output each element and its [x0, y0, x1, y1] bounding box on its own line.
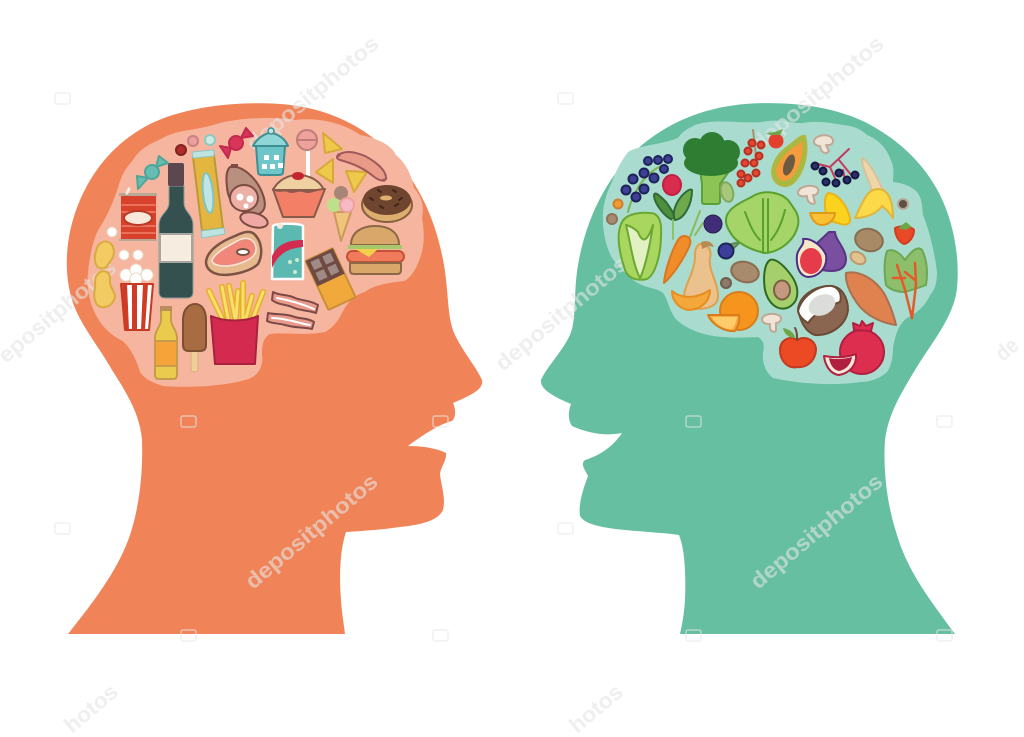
watermarks: hotos: [564, 679, 628, 737]
watermarks: depositphotos: [240, 469, 383, 594]
icon: elderberries: [812, 149, 858, 186]
icon: nacho chips: [316, 133, 367, 192]
icon: sweet potato: [846, 272, 896, 325]
icon: strawberry: [895, 222, 914, 244]
icon: avocado: [764, 260, 797, 309]
icon: teal candy: [137, 156, 168, 189]
icon: pink candy: [220, 128, 253, 158]
icon: apple: [780, 328, 816, 367]
icon: beer bottle: [155, 306, 177, 379]
icon: burger: [347, 226, 404, 274]
icon: papaya: [772, 136, 806, 186]
icon: napa cabbage: [619, 213, 661, 280]
watermarks: depositphotos: [241, 31, 384, 156]
icon: steak: [206, 232, 261, 275]
icon: donut: [362, 185, 412, 222]
icon: walnut: [721, 259, 761, 288]
watermarks: depositphotos: [490, 251, 633, 376]
head silhouette: junk food side: [67, 103, 482, 634]
icon: broccoli: [683, 132, 740, 204]
icon: pecans: [848, 226, 885, 267]
icon: mushrooms: [762, 135, 833, 332]
watermark camera icons: [55, 93, 952, 641]
icon: sugar jar: [253, 128, 288, 175]
brain area: junk food: [87, 118, 424, 387]
icon: salami: [226, 164, 269, 230]
watermarks: depositphotos: [745, 469, 888, 594]
icon: wine bottle: [159, 163, 193, 298]
icon: candy dots: [176, 135, 215, 155]
icon: banana: [855, 158, 908, 218]
icon: chard: [885, 248, 927, 318]
icon: cupcake: [273, 172, 325, 217]
icon: carrot: [664, 211, 703, 283]
watermarks: depositphotos: [746, 31, 889, 156]
icon: lemon: [810, 193, 850, 225]
icon: pomegranate: [824, 321, 884, 375]
icon: raspberry: [663, 175, 681, 195]
icon: spinach: [654, 190, 692, 239]
healthy food icons: [607, 129, 927, 375]
icon: blueberry branch: [622, 155, 672, 212]
icon: wrapped candy bar: [192, 150, 225, 238]
icon: ice cream cone: [327, 186, 354, 241]
icon: orange and brown seeds: [607, 200, 622, 224]
icon: figs: [797, 232, 846, 277]
icon: sausage: [336, 152, 388, 182]
icon: lollipop: [297, 130, 317, 176]
icon: chocolate bar: [306, 248, 356, 310]
watermarks: hotos: [59, 679, 123, 737]
icon: lettuce: [726, 192, 798, 253]
icon: popcorn bucket: [119, 250, 153, 330]
icon: blueberry with leaf: [718, 242, 740, 258]
icon: canned food: [119, 189, 157, 241]
head silhouette: healthy food side: [541, 103, 958, 634]
icon: bacon: [267, 292, 318, 329]
icon: coconut: [798, 286, 848, 335]
icon: soda can: [272, 223, 303, 279]
icon: tomato: [766, 129, 784, 148]
icon: orange: [708, 292, 758, 331]
icon: ice cream bar: [183, 304, 206, 372]
icon: red currants: [738, 130, 764, 186]
icon: peanuts: [94, 241, 115, 307]
brain area: healthy food: [603, 121, 937, 384]
icon: green seed: [719, 181, 735, 203]
icon: loose popcorn: [107, 227, 117, 237]
icon: french fries: [209, 283, 263, 364]
junk food icons: [94, 128, 412, 379]
icon: butternut squash: [672, 241, 718, 310]
icon: blackberry: [704, 215, 722, 233]
